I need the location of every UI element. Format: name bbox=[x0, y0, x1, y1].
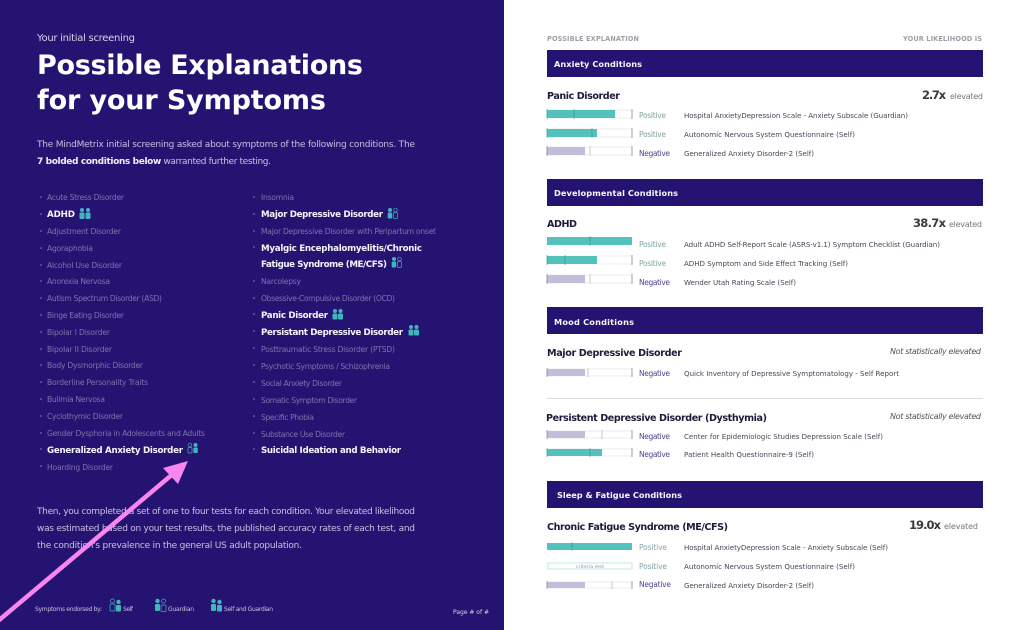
list: conditions column 1: Bipolar II Disorder bbox=[47, 345, 113, 354]
list: conditions column 2: Major Depressive Disorder bbox=[261, 210, 384, 220]
row: ADHD: Positive bbox=[639, 240, 666, 249]
row: ADHD: Wender Utah Rating Scale (Self) bbox=[684, 278, 796, 287]
row: chronic fatigue syndrome: criteria met bbox=[576, 564, 604, 570]
row: panic disorder: Generalized Anxiety Disorder-2 (Self) bbox=[684, 149, 814, 158]
row: chronic fatigue syndrome: Chronic Fatigue Syndrome (ME/CFS) bbox=[547, 522, 728, 533]
list: conditions column 1: Bipolar I Disorder bbox=[47, 328, 111, 337]
row: ADHD: Adult ADHD Self-Report Scale (ASRS-v1.1) Symptom Checklist (Guardian) bbox=[684, 240, 940, 249]
row: persistent depressive disorder: Not statistically elevated bbox=[890, 412, 982, 421]
closing text: the condition's prevalence in the general US adult population. bbox=[37, 541, 302, 551]
row: persistent depressive disorder bbox=[546, 412, 982, 459]
list: conditions column 2 bbox=[261, 193, 436, 456]
row: chronic fatigue syndrome: elevated bbox=[944, 522, 978, 531]
heading: developmental: Developmental Conditions bbox=[554, 188, 678, 198]
icon: self, GAD bbox=[188, 443, 198, 453]
column headers bbox=[547, 35, 982, 43]
list: conditions column 2: Social Anxiety Disorder bbox=[261, 379, 343, 388]
list: conditions column 2: Psychotic Symptoms / Schizophrenia bbox=[261, 362, 390, 371]
row: panic disorder: 2.7x bbox=[922, 88, 947, 102]
list: conditions column 2: Myalgic Encephalomyelitis/Chronic bbox=[261, 244, 422, 254]
row: chronic fatigue syndrome bbox=[547, 518, 978, 590]
list: conditions column 2: Posttraumatic Stress Disorder (PTSD) bbox=[261, 345, 395, 354]
list: conditions column 1: Bulimia Nervosa bbox=[47, 395, 105, 404]
row: major depressive disorder: Not statistically elevated bbox=[890, 347, 982, 356]
column headers: POSSIBLE EXPLANATION bbox=[547, 35, 639, 43]
legend: Guardian bbox=[168, 606, 194, 613]
intro text: 7 bolded conditions below warranted further testing. bbox=[37, 157, 271, 167]
list: conditions column 2: Obsessive-Compulsive Disorder (OCD) bbox=[261, 294, 395, 303]
heading: anxiety bbox=[547, 50, 983, 77]
row: persistent depressive disorder: Patient Health Questionnaire-9 (Self) bbox=[684, 450, 814, 459]
row: panic disorder: elevated bbox=[950, 92, 983, 101]
eyebrow: Your initial screening bbox=[36, 33, 135, 44]
icon: self and guardian, Panic bbox=[332, 309, 343, 320]
list: conditions column 2: Somatic Symptom Disorder bbox=[261, 396, 358, 405]
list: conditions column 2: Suicidal Ideation and Behavior bbox=[261, 446, 402, 456]
list: conditions column 1: Agoraphobia bbox=[47, 244, 93, 253]
row: ADHD: ADHD bbox=[547, 219, 577, 230]
heading: mood bbox=[547, 307, 983, 334]
column headers: YOUR LIKELIHOOD IS bbox=[902, 35, 982, 43]
row: ADHD: elevated bbox=[949, 220, 982, 229]
list: conditions column 2: Persistant Depressive Disorder bbox=[261, 328, 404, 338]
list: conditions column 1: Anorexia Nervosa bbox=[47, 277, 110, 286]
list: conditions column 1 bbox=[47, 193, 205, 472]
list: conditions column 1: Body Dysmorphic Disorder bbox=[47, 361, 144, 370]
title: Possible Explanations bbox=[37, 50, 363, 81]
list: conditions column 1: Alcohol Use Disorder bbox=[47, 261, 123, 270]
list: conditions column 1: Borderline Personality Traits bbox=[47, 378, 148, 387]
heading: developmental bbox=[547, 179, 983, 206]
row: chronic fatigue syndrome: 19.0x bbox=[909, 518, 942, 532]
list: conditions column 2: Major Depressive Disorder with Peripartum onset bbox=[261, 227, 436, 236]
row: panic disorder: Positive bbox=[639, 130, 666, 139]
row: persistent depressive disorder: Center for Epidemiologic Studies Depression Scale (Self) bbox=[684, 432, 883, 441]
panel: developmental conditions bbox=[547, 179, 983, 287]
list: conditions column 1: Gender Dysphoria in Adolescents and Adults bbox=[47, 429, 205, 438]
legend: Self and Guardian bbox=[224, 606, 273, 613]
row: panic disorder bbox=[547, 88, 983, 158]
list: conditions column 2: Narcolepsy bbox=[261, 277, 302, 286]
list: conditions column 2: Panic Disorder bbox=[261, 311, 329, 321]
title: for your Symptoms bbox=[37, 85, 326, 116]
row: panic disorder: Hospital AnxietyDepression Scale - Anxiety Subscale (Guardian) bbox=[684, 111, 908, 120]
legend: Self bbox=[123, 606, 134, 613]
list: conditions column 1: Hoarding Disorder bbox=[47, 463, 114, 472]
panel: anxiety conditions bbox=[547, 50, 983, 158]
list: conditions column 1: Adjustment Disorder bbox=[47, 227, 122, 236]
row: major depressive disorder: Major Depressive Disorder bbox=[547, 348, 682, 359]
row: chronic fatigue syndrome: Autonomic Nervous System Questionnaire (Self) bbox=[684, 562, 855, 571]
row: major depressive disorder bbox=[547, 347, 982, 378]
row: chronic fatigue syndrome: Generalized Anxiety Disorder-2 (Self) bbox=[684, 581, 814, 590]
row: persistent depressive disorder: Negative bbox=[639, 450, 670, 459]
divider bbox=[547, 398, 983, 399]
list: conditions column 1: Cyclothymic Disorder bbox=[47, 412, 124, 421]
row: ADHD: Positive bbox=[639, 259, 666, 268]
legend: Symptoms endorsed by: bbox=[35, 606, 102, 613]
intro text: The MindMetrix initial screening asked about symptoms of the following conditions. The bbox=[36, 140, 415, 150]
list: conditions column 2: Substance Use Disorder bbox=[261, 430, 346, 439]
row: panic disorder: Autonomic Nervous System Questionnaire (Self) bbox=[684, 130, 855, 139]
row: panic disorder: Positive bbox=[639, 111, 666, 120]
icon: guardian, MDD bbox=[388, 208, 398, 218]
list: conditions column 2: Specific Phobia bbox=[261, 413, 314, 422]
heading: sleep bbox=[547, 481, 983, 508]
list: conditions column 1: ADHD bbox=[47, 210, 75, 220]
list: conditions column 1: Acute Stress Disorder bbox=[47, 193, 125, 202]
row: ADHD: ADHD Symptom and Side Effect Tracking (Self) bbox=[684, 259, 848, 268]
row: panic disorder: Negative bbox=[639, 149, 670, 158]
panel: sleep and fatigue conditions bbox=[547, 481, 983, 590]
heading: mood: Mood Conditions bbox=[554, 317, 634, 327]
row: major depressive disorder: Quick Inventory of Depressive Symptomatology - Self Report bbox=[684, 369, 899, 378]
panel: mood conditions bbox=[546, 307, 983, 459]
row: panic disorder: Panic Disorder bbox=[547, 91, 620, 102]
list: conditions column 1: Generalized Anxiety Disorder bbox=[47, 446, 184, 456]
icon: self and guardian, Persistant bbox=[408, 325, 419, 336]
intro text bbox=[36, 140, 415, 167]
row: ADHD bbox=[547, 216, 982, 287]
row: persistent depressive disorder: Negative bbox=[639, 432, 670, 441]
closing text: was estimated based on your test results, the published accuracy rates of each test, and bbox=[37, 524, 415, 534]
row: persistent depressive disorder: Persistent Depressive Disorder (Dysthymia) bbox=[546, 413, 767, 424]
title bbox=[37, 50, 363, 116]
list bullets bbox=[40, 196, 255, 467]
heading: sleep: Sleep & Fatigue Conditions bbox=[557, 490, 682, 500]
page number: Page # of # bbox=[453, 609, 489, 616]
row: ADHD: Negative bbox=[639, 278, 670, 287]
list: conditions column 2: Fatigue Syndrome (ME/CFS) bbox=[261, 260, 387, 270]
heading: anxiety: Anxiety Conditions bbox=[554, 59, 642, 69]
arrow bbox=[0, 461, 188, 621]
row: ADHD: 38.7x bbox=[913, 216, 947, 230]
legend bbox=[35, 599, 273, 613]
closing text bbox=[36, 507, 415, 551]
icon: self and guardian, ADHD bbox=[80, 208, 90, 219]
panel: left background bbox=[0, 0, 504, 630]
row: chronic fatigue syndrome: Negative bbox=[639, 580, 671, 589]
list: conditions column 1: Autism Spectrum Disorder (ASD) bbox=[47, 294, 162, 303]
list: conditions column 1: Binge Eating Disorder bbox=[47, 311, 125, 320]
row: chronic fatigue syndrome: Hospital AnxietyDepression Scale - Anxiety Subscale (Self) bbox=[684, 543, 888, 552]
closing text: Then, you completed a set of one to four tests for each condition. Your elevated likelihood bbox=[36, 507, 415, 517]
icon: guardian, ME/CFS bbox=[392, 257, 402, 268]
list: conditions column 2: Insomnia bbox=[261, 193, 294, 202]
row: chronic fatigue syndrome: Positive bbox=[639, 562, 667, 571]
row: major depressive disorder: Negative bbox=[639, 369, 670, 378]
row: chronic fatigue syndrome: Positive bbox=[639, 543, 667, 552]
